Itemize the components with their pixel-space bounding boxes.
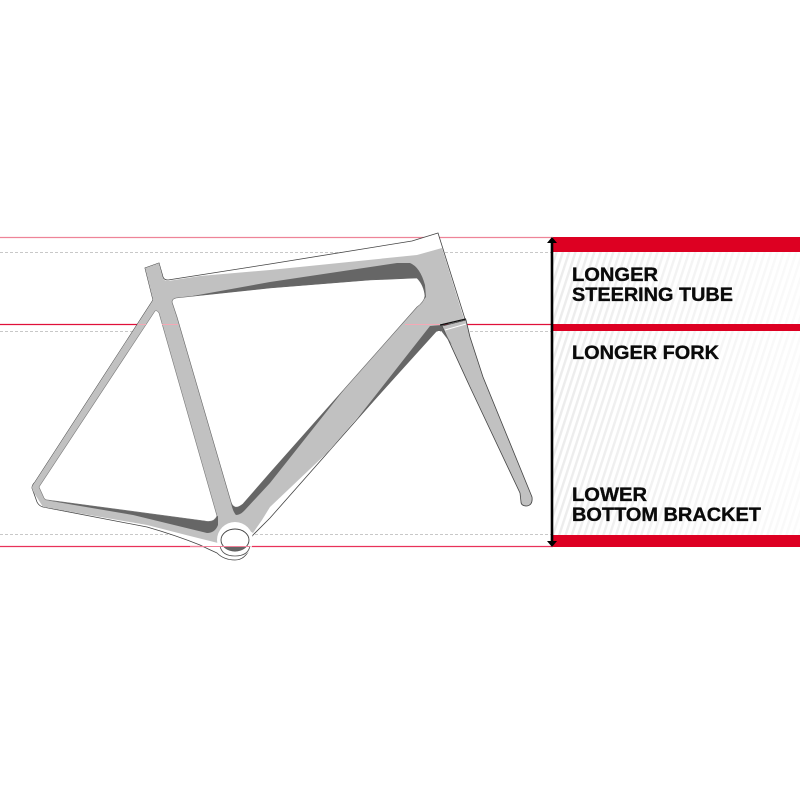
front triangle opening (172, 278, 425, 507)
label: lower bottom bracket: BOTTOM BRACKET (572, 504, 761, 526)
rear triangle opening (39, 311, 217, 521)
guide lines (0, 238, 553, 546)
bottom bracket outer ring (220, 546, 250, 556)
frame outline (32, 233, 465, 560)
bottom bracket shell (221, 529, 249, 551)
fork shade (442, 326, 452, 345)
bottom bracket glow (217, 522, 253, 558)
label: longer steering tube (572, 264, 733, 306)
bottom bracket shading (223, 546, 247, 551)
bicycle frame (31, 233, 466, 560)
label: lower bottom bracket (572, 484, 761, 526)
dark shading: down tube lower (353, 325, 444, 424)
dark shading: chain stay (45, 500, 218, 533)
red bars (553, 237, 800, 547)
fork highlight (445, 324, 466, 330)
label: longer steering tube: LONGER (572, 264, 658, 286)
frame grey fill (31, 248, 464, 544)
hatched background panel (553, 252, 800, 535)
guide line overlays on tubes (138, 324, 440, 546)
label: lower bottom bracket: LOWER (572, 484, 647, 506)
dark shading: top tube (187, 263, 426, 307)
label: longer steering tube: STEERING TUBE (572, 284, 733, 306)
dark shading: down tube upper (231, 372, 358, 515)
label: longer fork: LONGER FORK (572, 342, 719, 364)
head tube junction line (440, 319, 466, 325)
double-headed arrow (547, 237, 557, 547)
fork (442, 320, 532, 506)
